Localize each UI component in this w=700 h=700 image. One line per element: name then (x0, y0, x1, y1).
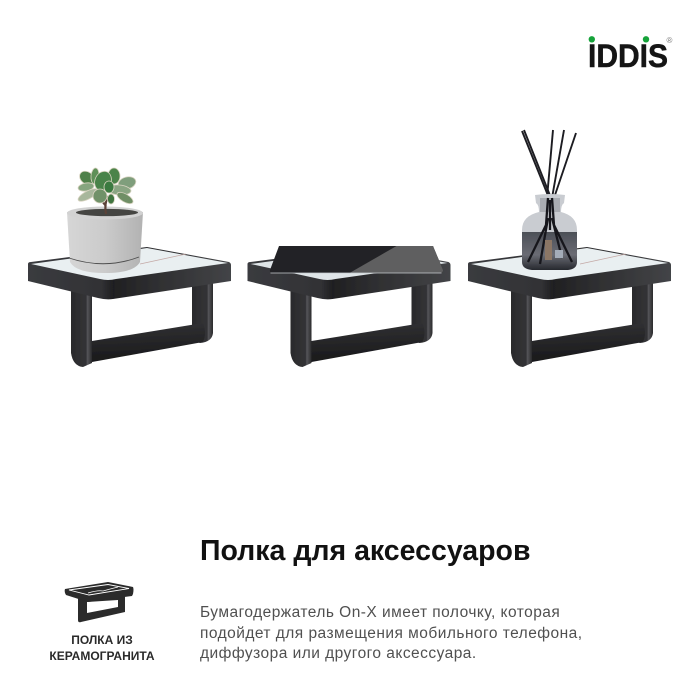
holder left leg (511, 290, 532, 367)
description text: Бумагодержатель On-X имеет полочку, которая (200, 604, 560, 621)
icon label: ПОЛКА ИЗ (71, 633, 133, 647)
diffuser bottle (522, 194, 577, 270)
marble vein (140, 254, 186, 264)
shelf band (468, 247, 671, 299)
pot (67, 206, 143, 273)
holder roller (92, 323, 205, 362)
description text: диффузора или другого аксессуара. (200, 645, 477, 662)
phone (270, 246, 443, 273)
shelf top (471, 248, 668, 280)
holder right leg (412, 281, 432, 343)
description text: подойдет для размещения мобильного телефона, (200, 625, 582, 642)
marble vein (580, 254, 626, 264)
shelf band (28, 247, 231, 299)
holder roller (312, 323, 424, 362)
holder left leg (290, 290, 312, 367)
holder right leg (192, 281, 213, 343)
logo: IDDIS: IDDIS (588, 38, 668, 74)
icon label (49, 633, 155, 663)
plant (76, 168, 137, 214)
holder right leg (632, 281, 653, 343)
icon: shelf of porcelain stoneware (65, 582, 134, 622)
heading: Полка для аксессуаров (200, 535, 530, 567)
product: holder with diffuser (468, 130, 671, 367)
shelf top (31, 248, 228, 280)
diffuser sticks (522, 130, 576, 198)
product: holder with phone (248, 246, 450, 367)
product: holder with plant (28, 168, 231, 367)
description text (200, 604, 582, 662)
holder left leg (71, 290, 92, 367)
logo: IDDIS: ® (666, 36, 672, 45)
holder roller (532, 323, 645, 362)
shelf band (248, 247, 450, 299)
shelf top (250, 248, 448, 280)
icon label: КЕРАМОГРАНИТА (49, 649, 155, 663)
